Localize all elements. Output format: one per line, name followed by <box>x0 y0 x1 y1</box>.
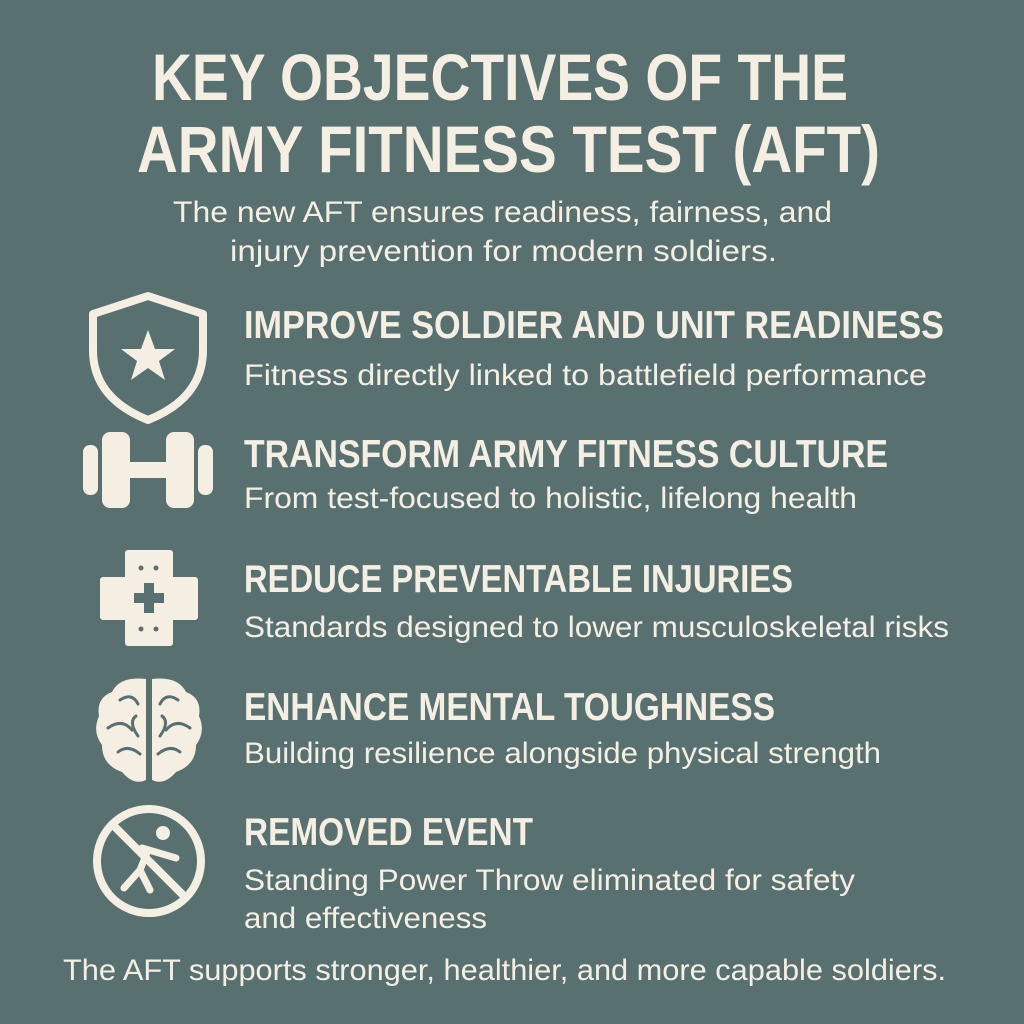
subtitle: The new AFT ensures readiness, fairness, and <box>173 196 832 229</box>
item 3 text <box>244 558 949 644</box>
item 1 text: Fitness directly linked to battlefield performance <box>244 359 927 392</box>
title <box>137 40 880 186</box>
item 5 text <box>244 811 855 935</box>
item 2 text: TRANSFORM ARMY FITNESS CULTURE <box>244 433 888 476</box>
item 2 text: From test-focused to holistic, lifelong health <box>244 482 857 515</box>
item 5 text: and effectiveness <box>244 902 487 935</box>
item 5 text: Standing Power Throw eliminated for safety <box>244 864 855 897</box>
item 4 text <box>244 686 881 770</box>
subtitle <box>173 196 832 268</box>
title: ARMY FITNESS TEST (AFT) <box>137 112 880 186</box>
item 4 text: ENHANCE MENTAL TOUGHNESS <box>244 686 775 729</box>
item 2 text <box>244 433 888 515</box>
subtitle: injury prevention for modern soldiers. <box>230 235 777 268</box>
icon: dumbbell <box>83 432 213 508</box>
icon: shield with star <box>93 296 203 420</box>
item 1 text: IMPROVE SOLDIER AND UNIT READINESS <box>244 304 944 347</box>
item 3 text: REDUCE PREVENTABLE INJURIES <box>244 558 793 601</box>
title: KEY OBJECTIVES OF THE <box>152 40 848 114</box>
icon: bandage cross <box>103 553 195 643</box>
item 3 text: Standards designed to lower musculoskeletal risks <box>244 611 949 644</box>
icon: no throwing sign <box>97 809 201 913</box>
item 1 text <box>244 304 944 392</box>
footer: The AFT supports stronger, healthier, and more capable soldiers. <box>63 954 946 987</box>
item 4 text: Building resilience alongside physical strength <box>244 737 881 770</box>
icon: brain <box>96 679 202 782</box>
item 5 text: REMOVED EVENT <box>244 811 533 854</box>
